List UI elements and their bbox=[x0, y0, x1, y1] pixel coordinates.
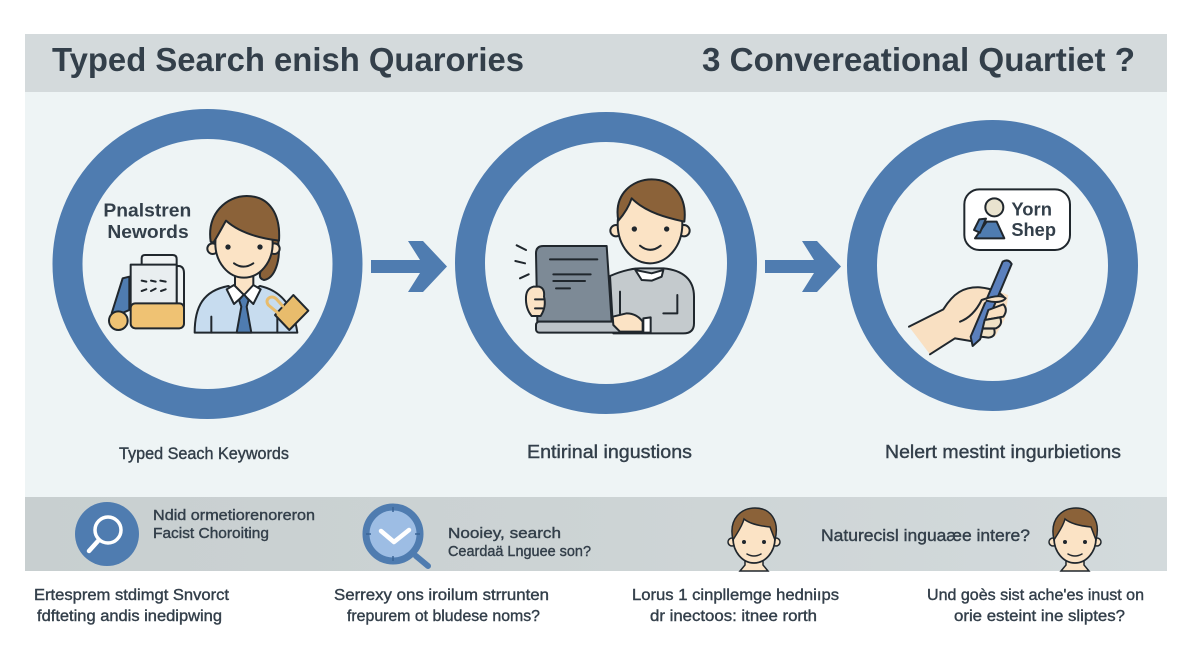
band text 3: Naturecisl inguaæe intere? bbox=[821, 526, 1030, 545]
caption 1: fdfteting andis inedipwing bbox=[37, 608, 222, 625]
caption 3 bbox=[632, 587, 839, 625]
icon: face 1 bbox=[728, 508, 780, 571]
header bar bbox=[25, 34, 1167, 92]
title: right: 3 Convereational Quartiet ? bbox=[702, 41, 1135, 78]
illustration 1: keywords bbox=[103, 196, 308, 333]
band text 2 bbox=[448, 525, 591, 560]
caption 2: frepurem ot bludese noms? bbox=[347, 608, 540, 625]
speech bubble bbox=[964, 189, 1070, 250]
icon: woman with tag bbox=[195, 196, 308, 333]
caption 1 bbox=[34, 587, 230, 625]
arrow 1 bbox=[371, 241, 447, 292]
speech bubble: Yorn bbox=[1011, 198, 1052, 219]
band text 1 bbox=[153, 507, 315, 542]
caption 1: Ertesprem stdimgt Snvorct bbox=[34, 587, 230, 604]
speech bubble: Shep bbox=[1011, 219, 1056, 240]
icon: man bbox=[610, 179, 694, 333]
caption 3: dr inectoos: itnee rorth bbox=[650, 608, 817, 625]
icon: documents and folder bbox=[109, 255, 184, 330]
ring 1 bbox=[68, 124, 348, 404]
icon label line 2: Newords bbox=[107, 221, 189, 242]
illustration 2: person with tablet bbox=[515, 179, 694, 333]
caption 2: Serrexy ons iroilum strrunten bbox=[334, 587, 549, 604]
caption 4: orie esteint ine sliptes? bbox=[954, 608, 1125, 625]
panel: main process background bbox=[25, 92, 1167, 497]
step label 3: Nelert mestint ingurbietions bbox=[885, 442, 1121, 462]
icon: magnifier badge bbox=[75, 502, 139, 566]
ring 2 bbox=[470, 127, 742, 399]
illustration 3: hand and pen bbox=[909, 189, 1070, 354]
icon: hand holding pen bbox=[909, 260, 1012, 354]
bottom band bbox=[25, 497, 1167, 571]
icon: face 2 bbox=[1049, 508, 1101, 571]
step label 1: Typed Seach Keywords bbox=[119, 444, 289, 463]
band text 1: Ndid ormetiorenoreron bbox=[153, 507, 315, 524]
caption 2 bbox=[334, 587, 549, 625]
icon label: Pnalstren bbox=[103, 200, 191, 221]
caption 3: Lorus 1 cinpllemge hedniıps bbox=[632, 587, 839, 604]
caption 4: Und goès sist ache'es inust on bbox=[927, 587, 1144, 604]
arrow 2 bbox=[765, 241, 841, 292]
icon: clock magnifier bbox=[366, 507, 428, 566]
title: left: Typed Search enish Quarories bbox=[52, 41, 524, 78]
step label 2: Entirinal ingustions bbox=[527, 442, 692, 462]
band text 2: Nooiey, search bbox=[448, 525, 561, 542]
band text 2: Ceardaä Lnguee son? bbox=[448, 543, 591, 560]
icon: tablet bbox=[515, 245, 651, 333]
ring 3 bbox=[862, 135, 1123, 396]
band text 1: Facist Choroiting bbox=[153, 525, 269, 542]
caption 4 bbox=[927, 587, 1144, 625]
